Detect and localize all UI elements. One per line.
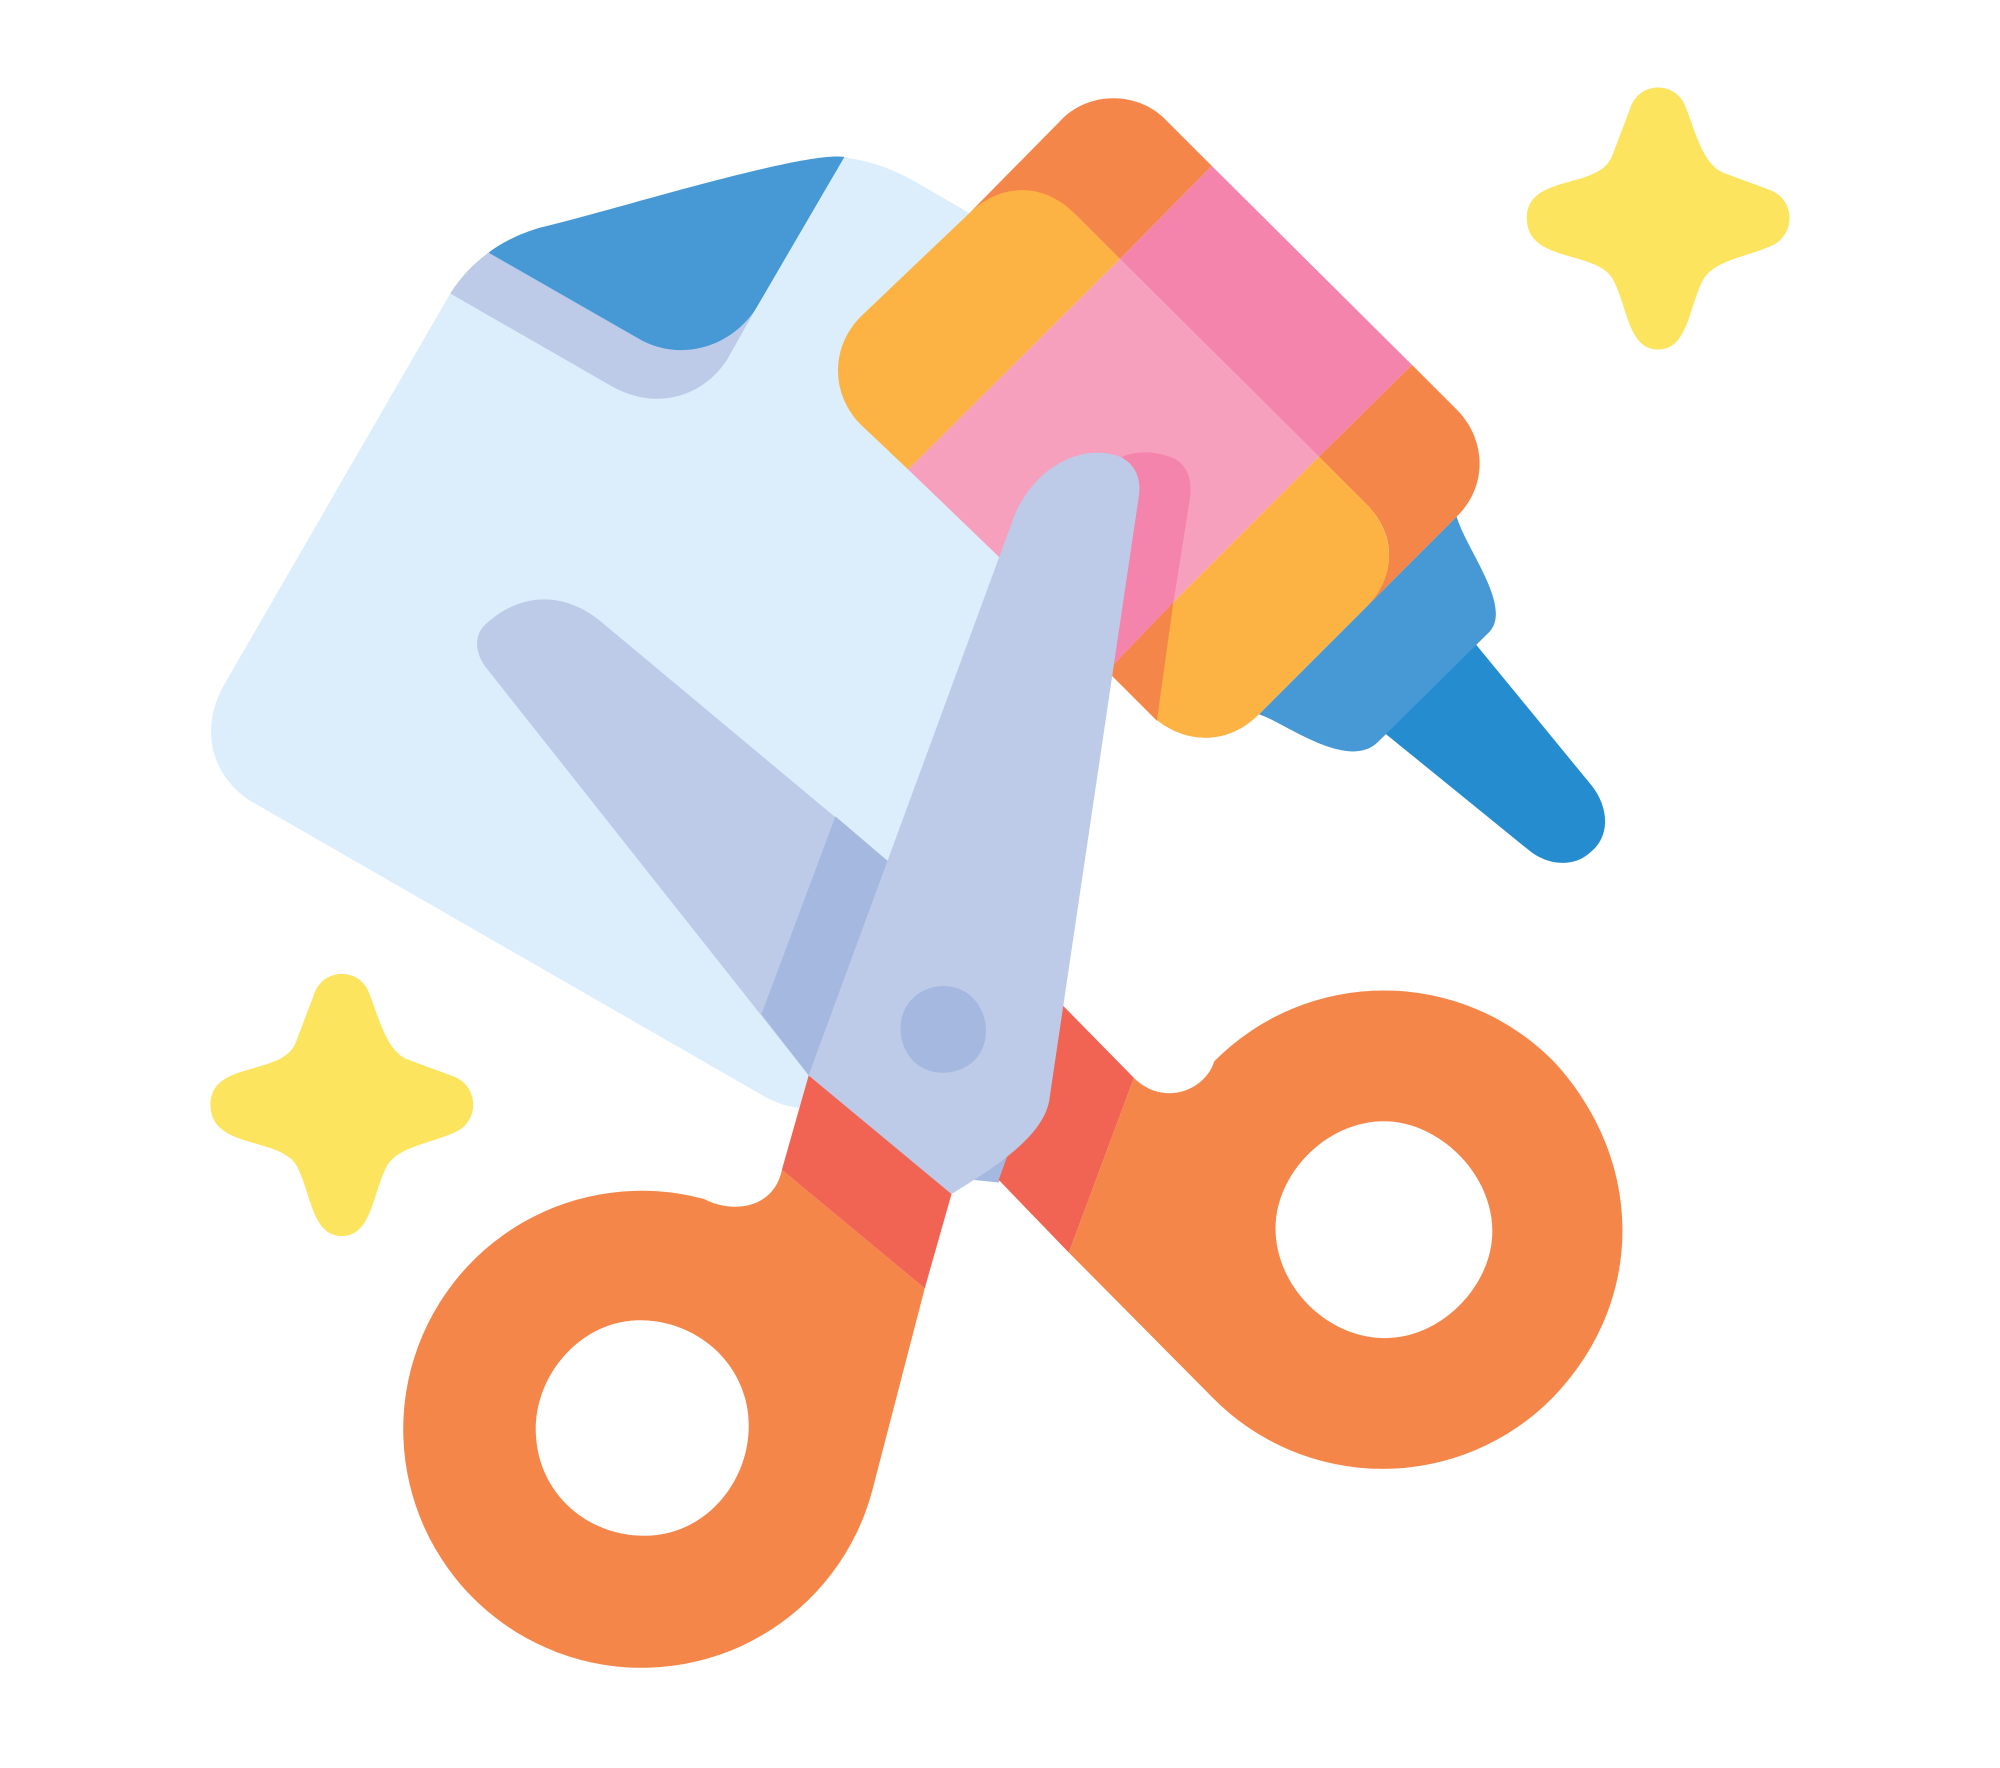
folded corner shadow bbox=[450, 253, 755, 399]
right handle neck bbox=[999, 1005, 1134, 1253]
orange right corner bbox=[1319, 365, 1480, 606]
icon: glue brush head bbox=[838, 98, 1480, 738]
small shade under pivot bbox=[973, 1154, 1010, 1182]
folded corner flap bbox=[489, 156, 844, 350]
right handle ring bbox=[1069, 990, 1622, 1469]
orange top corner bbox=[969, 98, 1212, 259]
icon: glue stick handle bbox=[1385, 644, 1605, 863]
icon: sparkle right bbox=[1527, 87, 1790, 350]
left handle neck bbox=[782, 1075, 952, 1288]
icon: sheet of paper bbox=[211, 156, 1097, 1108]
back blade shadow bbox=[761, 816, 888, 1075]
icon: glue stick collar bbox=[1259, 517, 1496, 751]
yellow bottom strip bbox=[1154, 457, 1389, 738]
yellow left strip bbox=[838, 190, 1120, 469]
back blade bbox=[477, 599, 1071, 1194]
front blade bbox=[809, 453, 1139, 1194]
icon: sparkle left bbox=[210, 974, 473, 1236]
orange bottom sliver bbox=[1112, 602, 1173, 721]
blade shadow on brush bbox=[1112, 452, 1191, 666]
icon: scissors bbox=[403, 453, 1622, 1668]
left handle ring bbox=[403, 1170, 925, 1668]
light pink label bbox=[908, 259, 1319, 666]
dark pink band bbox=[1120, 166, 1412, 457]
pivot screw bbox=[901, 986, 986, 1073]
